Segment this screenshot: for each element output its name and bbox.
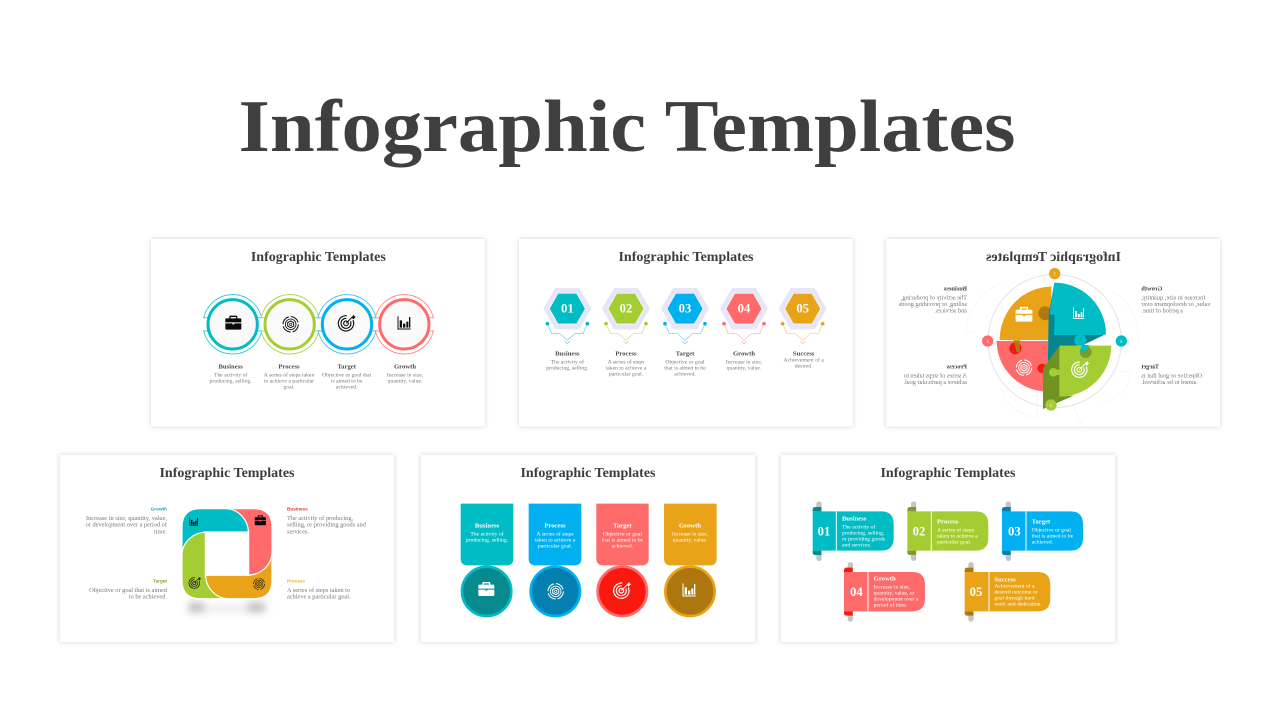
mirrored text: growth [1140,285,1211,315]
segment: green [182,532,239,599]
hexagon text: target: Target [676,350,695,357]
hexagon 05: 05 [796,302,809,316]
step text: growth: quantity, value. [388,379,423,385]
hexagon text: growth: Increase in size, [726,360,763,366]
text: process: Process [287,579,306,584]
step text: process [264,363,314,390]
text: process [287,579,351,601]
hexagon text: process [606,350,647,378]
tab card: process: A series of steps [537,531,573,538]
card 03 target: 03 [1008,524,1021,538]
circle step: target [318,295,376,354]
step text: process: Process [278,363,300,370]
main title: Infographic Templates [238,86,1016,168]
mirrored text: process [903,363,967,386]
card 01 business: Business [842,515,867,522]
tab card: business: The activity of [470,531,504,538]
mirrored text: growth: Increase in size, quantity, [1141,294,1205,301]
mirrored text: business: selling, or providing goods [898,301,967,308]
hexagon 02: 02 [620,302,632,316]
card 05 success: desired outcome or [994,590,1038,596]
text: process: A series of steps taken to [287,587,350,594]
hexagon text: business: Business [555,350,580,357]
hexagon text: process: A series of steps [608,359,644,366]
text: target [89,579,168,601]
card 03 target: Objective or goal [1032,527,1071,533]
mirrored text: target: Objective or goal that is [1141,372,1202,379]
card 03 target: that is aimed to be [1032,533,1074,539]
mirrored text: business: Business [943,285,967,292]
mirrored text: target: Target [1140,363,1159,370]
hexagon 01 [543,288,591,344]
card 04 growth: Growth [874,576,896,583]
mirrored text: target [1140,363,1202,386]
icon: chart [190,517,198,526]
hexagon 03: 03 [679,302,691,316]
card 04 growth: development over a [874,597,919,603]
text: growth [86,507,168,535]
number badge 3: 3 [1049,404,1052,409]
piece: teal [1048,283,1106,368]
panel: hexagons slide [519,239,853,427]
mirrored text: process: Process [946,363,967,370]
text: target: Objective or goal that is aimed [89,587,168,594]
card 01 business: The activity of [842,524,875,531]
step text: business: The activity of [214,372,247,379]
card 04 growth: Increase in size, [874,585,911,591]
text: business: selling, or providing goods and [287,522,367,529]
mirrored text: target: aimed to be achieved. [1141,379,1197,386]
step text: process: to achieve a particular [264,379,314,385]
tab card: process: Process [544,522,566,529]
text: growth: Growth [151,507,167,512]
tab card: business: producing, selling. [466,538,509,544]
tab card: target: Target [613,522,632,529]
number badge 4 [1116,335,1127,347]
icon: briefcase [255,515,266,525]
text: business [287,507,367,535]
mirrored text: growth: value, or development over [1140,301,1211,308]
card 04 growth: period of time. [874,602,908,609]
hexagon text: success [784,350,824,370]
step text: target: Target [337,363,357,370]
segment: orange [206,542,272,599]
card 05 success: work and dedication. [994,602,1043,608]
card 03 target [1002,501,1083,561]
tab card: business: Business [475,522,500,529]
puzzle diagram [997,283,1111,409]
step text: process: A series of steps taken [264,372,314,379]
number badge 2: 2 [986,340,989,345]
text: growth: or development over a period of [86,522,168,529]
hexagon text: target: that is aimed to be [664,366,706,372]
icon circle: business [462,567,511,616]
text: business: Business [287,507,308,512]
step text: process: goal. [283,384,295,390]
icon: process [253,578,265,590]
tab card: target: achieved. [612,544,634,550]
hexagon text: growth [726,350,763,372]
tab card: target: that is aimed to be [602,538,644,544]
hexagon text: target: Objective or goal [665,360,705,366]
step text: growth: Growth [394,363,416,370]
card 02 process: taken to achieve a [937,533,978,539]
hexagon text: business [546,350,589,372]
step text: business: producing, selling. [210,379,252,385]
tab card: business [461,504,513,565]
card 03 target: Target [1032,518,1051,525]
tab card: growth [664,504,717,565]
hexagon 03 [661,288,709,344]
panel: circles slide [151,239,485,427]
step text: target: achieved. [336,384,358,390]
step text: growth [387,363,424,385]
mirrored slide heading: Infographic Templates [985,250,1121,265]
card 03 target: achieved. [1032,539,1054,545]
hexagon text: target: achieved. [674,372,696,378]
panel: tabs and circles slide [421,455,755,642]
slide heading: Infographic Templates [159,466,295,481]
hexagon text: process: particular goal. [609,372,644,378]
number badge 2 [982,335,993,347]
mirrored text: growth: Growth [1141,285,1162,292]
text: business: The activity of producing, [287,515,353,522]
hexagon text: business: producing, selling. [546,366,589,372]
tab card: growth: Growth [679,522,701,529]
icon: target [187,576,201,590]
hexagon 02 [602,288,650,344]
text: process: achieve a particular goal. [287,594,351,601]
card 02 process: A series of steps [937,526,974,533]
mirrored text: business [898,285,967,315]
slide heading: Infographic Templates [251,250,386,265]
segment: teal base [182,509,248,565]
tab card: growth: Increase in size, [672,532,709,538]
faint puzzle outline [965,282,1139,425]
card 05 success [965,562,1050,622]
card 04 growth: 04 [850,585,863,599]
text: business: services. [287,528,309,535]
step text: growth: Increase in size, [387,373,424,379]
tab card: target [596,504,649,565]
hexagon text: target [664,350,706,378]
text: growth: time. [154,528,167,535]
step text: target: is aimed to be [331,379,363,385]
card 02 process: Process [937,518,959,525]
loop diagram [182,509,272,599]
hexagon 05 [779,288,827,344]
segment: red [215,509,272,575]
text: growth: Increase in size, quantity, value, [86,515,167,522]
number badge 1: 1 [1053,273,1056,278]
segment: teal end over red [205,508,249,532]
hexagon 04 [720,288,768,344]
hexagon text: process: taken to achieve a [606,366,647,372]
panel: rounded loop slide [60,455,394,642]
piece: orange [1000,287,1052,350]
card 01 business [813,501,894,561]
card 01 business: 01 [818,524,830,538]
hexagon text: success: desired. [795,364,813,370]
step text: business: Business [218,363,243,370]
tab card: process: taken to achieve a [535,538,576,544]
mirrored text: business: The activity of producing, [901,294,967,301]
piece: green [1043,345,1111,409]
icon circle: growth [665,567,715,616]
icon circle: process [531,567,580,616]
card 05 success: Success [994,577,1016,584]
circle step: business [204,295,262,354]
step text: business [210,363,252,385]
hexagon text: success: Achievement of a [784,357,824,364]
mirrored text: process: A series of steps taken to [904,372,967,379]
circle step: process [261,295,319,354]
hexagon 04: 04 [738,302,751,316]
card 05 success: Achievement of a [994,583,1035,590]
ring [988,274,1121,408]
step text: target: Objective or goal that [322,373,372,379]
card 05 success: 05 [970,585,982,599]
tab card: target: Objective or goal [603,532,642,538]
circle step: growth [375,295,433,354]
mirrored text: business: and services. [934,308,967,315]
number badge 1 [1049,268,1060,279]
slide heading: Infographic Templates [880,466,1016,481]
icon circle: target [598,567,647,616]
number badge 3 [1045,399,1057,411]
text: target: Target [153,579,167,584]
piece: red [997,341,1049,392]
number badge 4: 4 [1120,340,1123,345]
card 05 success: goal through hard [994,596,1035,602]
panel: scroll cards slide [781,455,1115,642]
hexagon text: growth: quantity, value. [727,366,762,372]
tab card: growth: quantity, value. [673,538,708,544]
hexagon text: success: Success [793,350,815,357]
card 02 process: 02 [913,524,925,538]
card 02 process: particular goal. [937,539,972,545]
card 01 business: producing, selling, [842,531,885,537]
tab card: process [529,504,581,565]
hexagon text: process: Process [615,350,637,357]
step text: target [322,363,372,390]
card 04 growth: quantity, value, or [874,591,915,597]
tab card: process: particular goal. [538,544,573,550]
hexagon 01: 01 [561,302,574,316]
panel: mirrored puzzle slide [886,239,1220,427]
slide heading: Infographic Templates [618,250,754,265]
slide heading: Infographic Templates [520,466,656,481]
card 04 growth [844,562,925,622]
text: target: to be achieved. [129,594,167,601]
mirrored text: growth: a period of time. [1141,308,1183,315]
card 02 process [907,501,988,561]
mirrored text: process: achieve a particular goal. [903,379,967,386]
card 01 business: and services. [842,542,872,548]
hexagon text: growth: Growth [733,350,755,357]
hexagon text: business: The activity of [551,359,584,366]
card 01 business: or providing goods [842,536,885,542]
blurred shadow [188,602,265,613]
